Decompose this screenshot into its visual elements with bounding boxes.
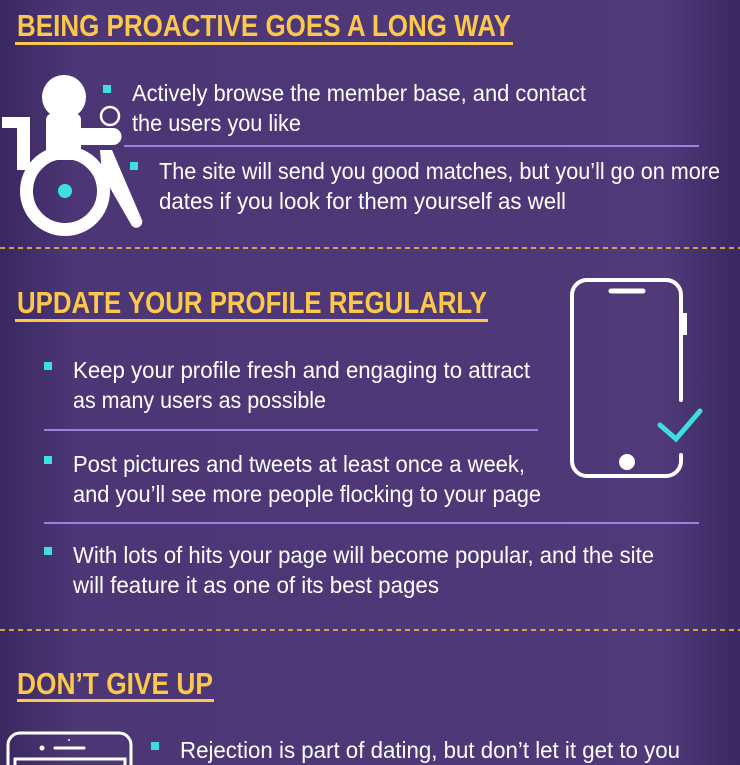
bullets: proactive [103,80,720,214]
bullets: proactive: The site will send you good matches, but you’ll go on more [159,158,720,184]
bullets: proactive: Actively browse the member base, and contact [132,80,587,106]
icon: phone with check [572,280,700,476]
heading: update profile: UPDATE YOUR PROFILE REGULARLY [17,285,487,320]
bullets: don't give up: Rejection is part of dating, but don’t let it get to you [180,737,680,763]
icon: wheelchair user [2,75,142,230]
bullets: proactive: the users you like [132,110,301,136]
icon: tablet [8,733,131,765]
bullets: update profile: Keep your profile fresh and engaging to attract [73,357,531,383]
heading: being proactive: BEING PROACTIVE GOES A LONG WAY [17,8,511,43]
bullets: update profile [44,357,699,598]
bullets: update profile: will feature it as one of its best pages [72,572,439,598]
bullets: proactive: dates if you look for them yourself as well [159,188,566,214]
heading: don't give up: DON’T GIVE UP [17,666,213,701]
bullets: update profile: and you’ll see more people flocking to your page [73,481,541,507]
bullets: update profile: Post pictures and tweets at least once a week, [73,451,525,477]
bullets: update profile: With lots of hits your page will become popular, and the site [73,542,654,568]
bullets: update profile: as many users as possible [73,387,326,413]
